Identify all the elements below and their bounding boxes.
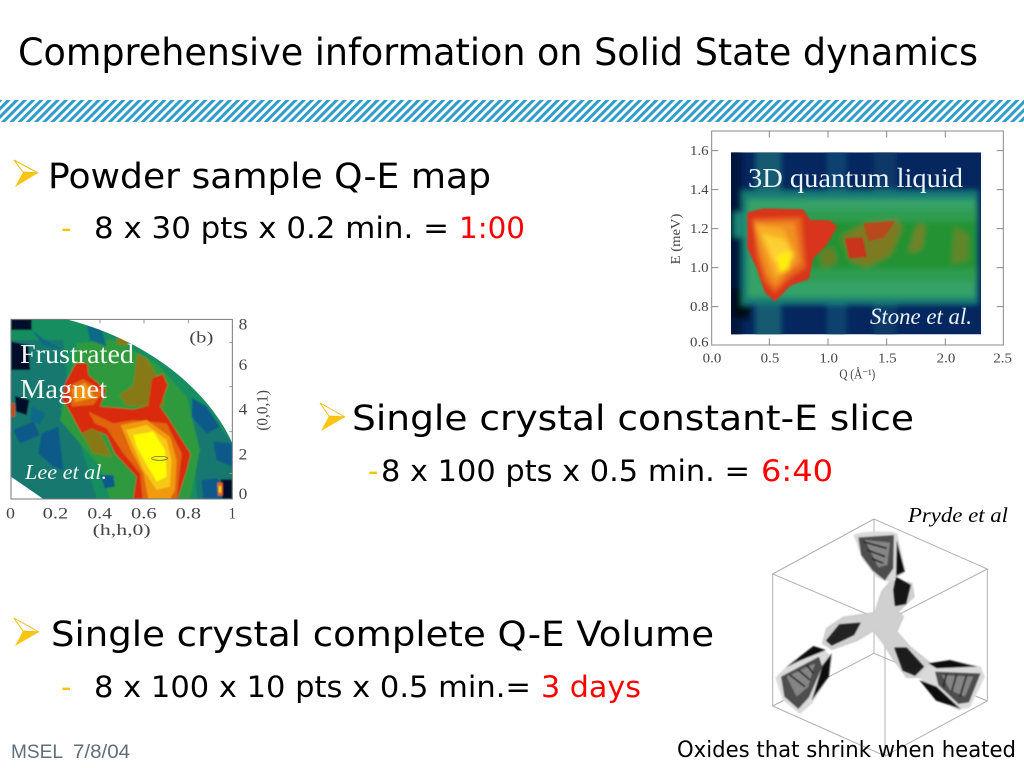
light central body xyxy=(823,580,933,677)
left lobe xyxy=(775,623,861,714)
plot frame xyxy=(11,319,232,499)
bullet dash: - xyxy=(368,454,378,488)
bullet dash: - xyxy=(61,670,71,704)
y axis title: E (meV) xyxy=(668,214,683,264)
bottom axis labels: 0.6 xyxy=(131,506,157,523)
right axis labels: 2 xyxy=(239,446,247,463)
x axis labels: 0.0 xyxy=(703,351,722,366)
chart: 3D quantum liquid Q-E map xyxy=(668,131,1012,381)
icon: arrow bullet xyxy=(320,403,345,431)
x axis labels: 1.5 xyxy=(878,351,897,366)
tick marks xyxy=(100,319,232,473)
time: powder: 1:00 xyxy=(459,211,525,245)
heatmap xyxy=(727,148,981,338)
bottom axis labels xyxy=(6,506,236,523)
heading: constant-E slice: Single crystal constant-E slice xyxy=(352,399,914,439)
plot frame xyxy=(712,131,1003,345)
right axis labels xyxy=(239,316,248,503)
y axis labels: 0.8 xyxy=(690,299,709,314)
icon: arrow bullet xyxy=(14,160,38,187)
heatmap xyxy=(7,317,237,503)
bottom axis labels: 0 xyxy=(6,506,15,523)
y axis labels: 1.0 xyxy=(690,260,709,275)
right axis labels: 6 xyxy=(239,357,248,374)
footer: MSEL date: 7/8/04 xyxy=(73,742,130,763)
footer: MSEL date: MSEL xyxy=(11,742,63,763)
figure: negative thermal expansion cube xyxy=(773,519,987,756)
label: Magnet: Magnet xyxy=(20,374,108,404)
bottom axis labels: 0.4 xyxy=(87,506,112,523)
text: powder calculation: 8 x 30 pts x 0.2 min. = xyxy=(94,211,449,245)
y axis labels: 0.6 xyxy=(690,334,709,349)
right axis title: (0,0,1) xyxy=(254,390,271,431)
y axis labels: 1.2 xyxy=(690,221,709,236)
section: powder sample xyxy=(14,157,525,245)
axis ticks xyxy=(712,131,1003,345)
y axis labels: 1.6 xyxy=(690,143,709,158)
credit: Stone et al.: Stone et al. xyxy=(870,304,972,329)
x axis labels xyxy=(703,351,1012,366)
section: constant-E slice xyxy=(320,399,914,488)
label: Frustrated: Frustrated xyxy=(20,339,135,369)
bottom axis labels: 1 xyxy=(229,506,236,523)
credit: Pryde et al: Pryde et al xyxy=(907,503,1008,527)
heading: powder sample: Powder sample Q-E map xyxy=(48,157,491,197)
section: complete volume xyxy=(14,615,714,704)
cube wireframe xyxy=(773,519,987,756)
x axis labels: 2.0 xyxy=(937,351,956,366)
right lobe xyxy=(894,648,985,710)
right axis labels: 8 xyxy=(239,316,248,333)
title: Comprehensive information on Solid State dynamics xyxy=(18,31,978,74)
bottom axis title: (h,h,0) xyxy=(93,522,151,539)
chart: frustrated magnet map xyxy=(6,316,271,539)
striped divider band xyxy=(0,100,1024,122)
x axis labels: 1.0 xyxy=(819,351,838,366)
x axis title: Q (Å⁻¹) xyxy=(839,366,875,381)
bottom axis labels: 0.2 xyxy=(43,506,68,523)
icon: arrow bullet xyxy=(14,618,39,646)
right axis labels: 4 xyxy=(239,402,248,419)
credit: Lee et al.: Lee et al. xyxy=(24,460,107,484)
heading: complete volume: Single crystal complete Q-E Volume xyxy=(51,615,714,655)
upper lobe xyxy=(853,531,911,606)
y axis labels: 1.4 xyxy=(690,182,709,197)
footer: MSEL date xyxy=(11,742,130,763)
text: slice calculation: 8 x 100 pts x 0.5 min. = xyxy=(381,454,750,488)
y axis labels xyxy=(690,143,709,349)
bullet dash: - xyxy=(61,211,71,245)
caption: oxides: Oxides that shrink when heated xyxy=(677,738,1016,763)
time: slice: 6:40 xyxy=(761,454,833,488)
time: volume: 3 days xyxy=(541,670,641,704)
x axis labels: 0.5 xyxy=(761,351,780,366)
text: volume calculation: 8 x 100 x 10 pts x 0.5 min.= xyxy=(94,670,531,704)
panel tag (b): (b) xyxy=(189,329,213,346)
right axis labels: 0 xyxy=(239,486,248,503)
label: 3D quantum liquid: 3D quantum liquid xyxy=(748,163,964,193)
bottom axis labels: 0.8 xyxy=(176,506,201,523)
x axis labels: 2.5 xyxy=(993,351,1012,366)
